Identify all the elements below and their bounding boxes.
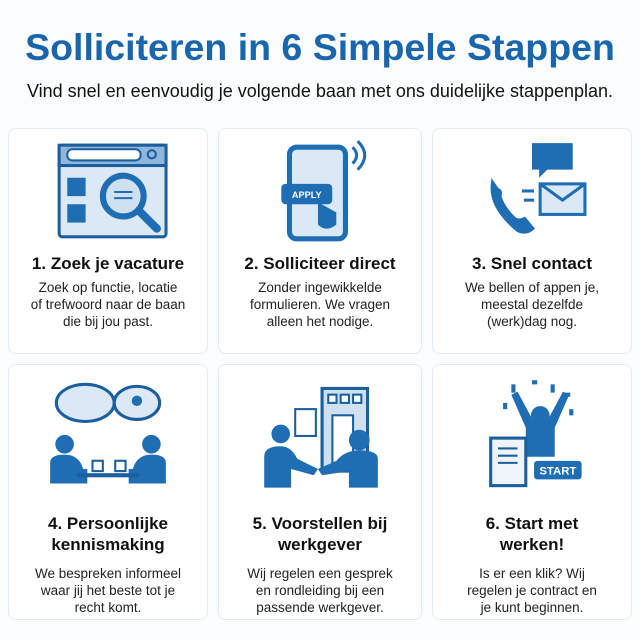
heading 4: kennismaking xyxy=(51,535,165,554)
heading 4 xyxy=(48,514,168,554)
heading 5 xyxy=(253,514,387,554)
heading 5: 5. Voorstellen bij xyxy=(253,514,387,533)
text 6: Is er een klik? Wij xyxy=(479,566,585,581)
text 1 xyxy=(31,280,185,329)
subtitle: Vind snel en eenvoudig je volgende baan met ons duidelijke stappenplan. xyxy=(27,81,613,101)
heading 1: 1. Zoek je vacature xyxy=(32,254,184,273)
text 3: meestal dezelfde xyxy=(481,297,583,312)
text 4 xyxy=(35,566,181,615)
text 6 xyxy=(467,566,597,615)
heading 3: 3. Snel contact xyxy=(472,254,592,273)
text 1: Zoek op functie, locatie xyxy=(39,280,177,295)
text 2: Zonder ingewikkelde xyxy=(258,280,382,295)
panel: step 4 xyxy=(8,364,208,620)
icon: conversation xyxy=(50,382,166,484)
panel: step 2 xyxy=(218,128,422,354)
icon: celebration start xyxy=(489,380,582,488)
heading 5: werkgever xyxy=(278,535,362,554)
heading 4: 4. Persoonlijke xyxy=(48,514,168,533)
heading 6 xyxy=(486,514,578,554)
heading 6: werken! xyxy=(500,535,564,554)
text 1: of trefwoord naar de baan xyxy=(31,297,185,312)
text 5: en rondleiding bij een xyxy=(256,583,384,598)
text 2: formulieren. We vragen xyxy=(250,297,390,312)
icon: browser search xyxy=(58,144,168,238)
text 1: die bij jou past. xyxy=(63,314,153,329)
text 2: alleen het nodige. xyxy=(267,314,373,329)
panel: step 3 xyxy=(432,128,632,354)
panel: step 1 xyxy=(8,128,208,354)
panel: step 6 xyxy=(432,364,632,620)
text 3: We bellen of appen je, xyxy=(465,280,599,295)
text 4: We bespreken informeel xyxy=(35,566,181,581)
heading 6: 6. Start met xyxy=(486,514,578,533)
text 4: waar jij het beste tot je xyxy=(41,583,175,598)
text 3 xyxy=(465,280,599,329)
heading 2: 2. Solliciteer direct xyxy=(244,254,396,273)
text 6: je kunt beginnen. xyxy=(481,600,583,615)
text 5 xyxy=(247,566,393,615)
icon: phone contact xyxy=(490,143,586,234)
icon: handshake building xyxy=(264,386,378,488)
icon: celebration start: START xyxy=(539,465,576,477)
icon: phone apply: APPLY xyxy=(292,190,322,200)
text 3: (werk)dag nog. xyxy=(487,314,577,329)
text 2 xyxy=(250,280,390,329)
icon: phone apply xyxy=(281,140,366,242)
title: Solliciteren in 6 Simpele Stappen xyxy=(25,26,615,68)
text 6: regelen je contract en xyxy=(467,583,597,598)
text 4: recht komt. xyxy=(75,600,141,615)
text 5: Wij regelen een gesprek xyxy=(247,566,393,581)
panel: step 5 xyxy=(218,364,422,620)
text 5: passende werkgever. xyxy=(256,600,384,615)
